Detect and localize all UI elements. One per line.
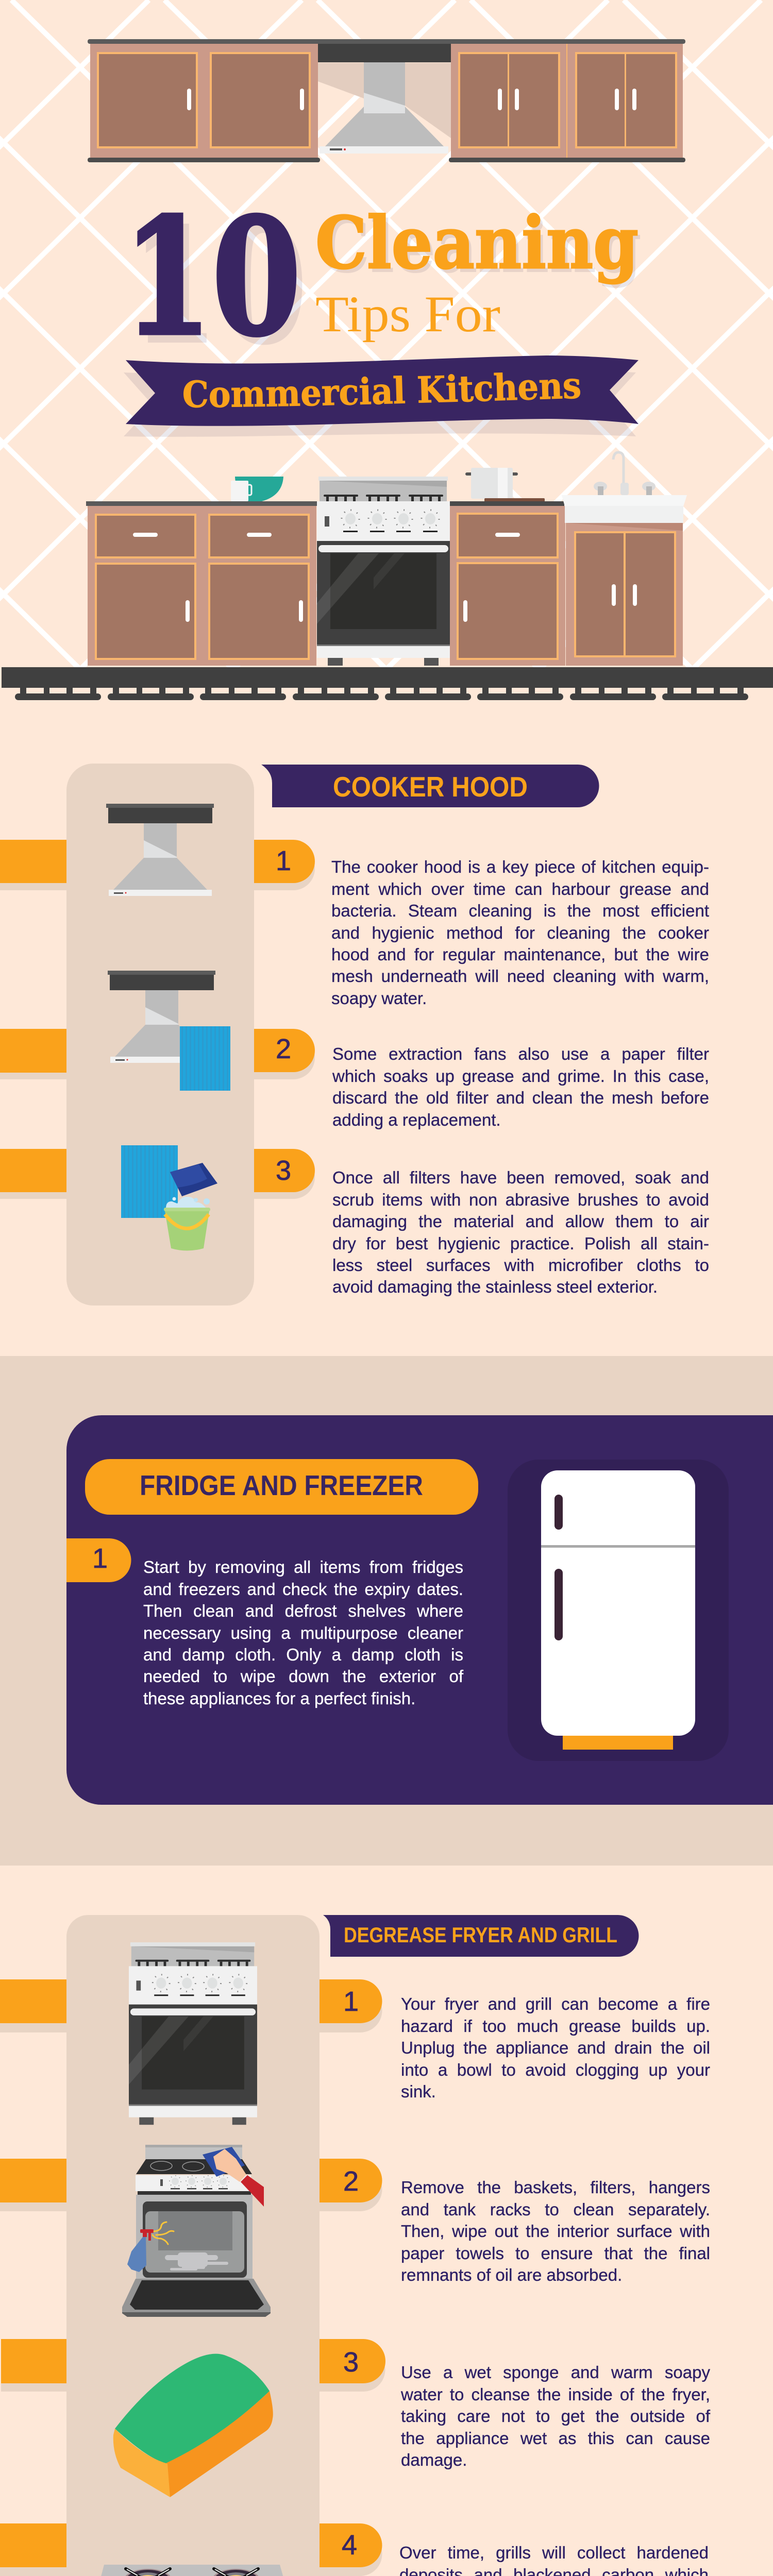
tab 2 with number [0,1029,315,1079]
tab 3 with number [0,1149,315,1199]
text: fryer step 3: water to cleanse the inside of the fryer, [401,2385,710,2404]
tab 2 with number: 2 [276,1033,291,1064]
text: fryer step 3: Use a wet sponge and warm soapy [401,2363,710,2382]
text: fridge step 1: Then clean and defrost shelves where [143,1601,463,1620]
text: fridge step 1: necessary using a multipurpose cleaner [143,1623,463,1642]
text: fryer step 1: into a bowl to avoid clogging up your [401,2060,710,2079]
icon: filter and bucket [121,1145,217,1251]
text: fryer step 3 [401,2363,710,2470]
tab 3 with number: 3 [276,1155,291,1186]
section: cooker hood [0,764,599,1306]
right wall cabinet [451,44,683,158]
text: fryer step 3: taking care not to get the outside of [401,2406,710,2426]
section header: FRIDGE AND FREEZER [140,1469,423,1501]
text: cooker hood step 3: less steel surfaces with microfiber cloths to [332,1256,709,1275]
text: cooker hood step 3: scrub items with non abrasive brushes to avoid [332,1190,709,1209]
text: fryer step 2: Remove the baskets, filters, hangers [401,2178,710,2197]
text: fryer step 2 [401,2178,710,2284]
tab 4 with number [0,2523,382,2576]
right base cabinet [450,501,565,666]
text: grill step 4 [399,2543,709,2576]
text: cooker hood step 3: dry for best hygienic practice. Polish all stain- [332,1234,709,1253]
text: cooker hood step 2 [332,1044,709,1129]
tab 1 with number: 1 [276,845,291,876]
icon: open oven being cleaned [122,2145,271,2317]
section header [323,1915,639,1957]
tab 2 with number: 2 [343,2166,359,2197]
tab 1 with number: 1 [92,1543,108,1574]
tab 1 with number: 1 [343,1986,359,2017]
text: fridge step 1: these appliances for a perfect finish. [143,1689,415,1708]
text: cooker hood step 2: Some extraction fans also use a paper filter [332,1044,709,1063]
text: cooker hood step 1: The cooker hood is a key piece of kitchen equip- [331,857,709,876]
text: cooker hood step 3: avoid damaging the stainless steel exterior. [332,1277,658,1296]
section header [85,1459,478,1515]
tab 4 with number: 4 [342,2530,357,2561]
panel: fridge and freezer [66,1415,773,1805]
text: fryer step 2: and tank racks to clean separately. [401,2200,710,2219]
text: fryer step 1: hazard if too much grease builds up. [401,2016,710,2036]
icon: fridge [508,1460,729,1761]
text: cooker hood step 1: bacteria. Steam cleaning is the most efficient [331,901,709,920]
base kitchen cabinets and appliances [86,452,687,666]
tab 2 with number [0,2159,382,2211]
image panel [66,1915,320,2576]
text: cooker hood step 3 [332,1168,709,1296]
text: cooker hood step 1: hood and for regular maintenance, but the wire [331,945,709,964]
left wall cabinet [90,44,318,158]
cooker hood [318,44,451,154]
ribbon [126,355,638,426]
tab 3 with number: 3 [343,2347,359,2378]
section: degrease fryer and grill [0,1915,639,2576]
text: cooker hood step 1: mesh underneath will need cleaning with warm, [331,967,709,986]
text: cooker hood step 1 [331,857,709,1008]
items on counter [231,468,545,502]
text: cooker hood step 3: Once all filters have been removed, soak and [332,1168,709,1187]
text: fridge step 1: and freezers and check the expiry dates. [143,1580,463,1599]
text: fryer step 3: damage. [401,2450,467,2469]
tile wall pattern [0,0,773,670]
text: fridge step 1: Start by removing all items from fridges [143,1557,463,1577]
text: fryer step 1: Your fryer and grill can become a fire [401,1994,710,2013]
text: fryer step 3: the appliance wet as this can cause [401,2429,710,2448]
heading words Tips For: Tips For [315,285,500,343]
text: cooker hood step 2: adding a replacement. [332,1110,501,1129]
kitchen floor [2,667,773,700]
title shadow [124,193,642,437]
tab 3 with number [1,2339,385,2392]
big number 10: 10 [123,183,301,371]
icon: gas hob with burners [84,2565,301,2576]
section: fridge background [0,1356,773,1866]
icon: oven [129,1942,257,2125]
icon: hood with filter [108,971,230,1091]
section header: COOKER HOOD [333,771,528,803]
text: cooker hood step 2: discard the old filter and clean the mesh before [332,1088,709,1107]
tab 1 with number [0,1979,382,2032]
text: fryer step 2: remnants of oil are absorbed. [401,2265,622,2284]
image panel [66,764,254,1306]
title shadow: Cleaning [318,205,642,289]
text: cooker hood step 3: damaging the material and allow them to air [332,1212,709,1231]
text: grill step 4: Over time, grills will collect hardened [399,2543,709,2562]
title [123,183,642,437]
text: fridge step 1 [143,1557,464,1708]
text: fryer step 2: paper towels to ensure that the final [401,2244,710,2263]
text: fryer step 1: Unplug the appliance and drain the oil [401,2038,710,2057]
tab 1 with number [66,1538,131,1582]
text: fryer step 1 [401,1994,710,2101]
tab 1 with number [0,840,315,890]
icon: sponge [113,2354,273,2497]
text: cooker hood step 1: ment which over time can harbour grease and [331,879,709,899]
heading word Cleaning: Cleaning [315,200,638,285]
left base cabinets [86,501,317,666]
text: fridge step 1: and damp cloth. Only a damp cloth is [143,1645,463,1664]
sink cabinet [562,452,687,666]
title shadow: 10 [130,193,308,381]
ribbon text: Commercial Kitchens [183,372,580,408]
text: cooker hood step 2: which soaks up grease and grime. In this case, [332,1066,709,1086]
range cooker [317,477,450,666]
upper kitchen cabinets [88,39,685,162]
icon: cooker hood [106,804,214,896]
text: fryer step 2: Then, wipe out the interior surface with [401,2222,710,2241]
text: fryer step 1: sink. [401,2082,436,2101]
text: cooker hood step 1: and hygienic method for cleaning the cooker [331,923,709,942]
section header [261,765,599,807]
text: cooker hood step 1: soapy water. [331,989,427,1008]
text: fridge step 1: needed to wipe down the exterior of [143,1667,463,1686]
section header: DEGREASE FRYER AND GRILL [344,1923,617,1947]
